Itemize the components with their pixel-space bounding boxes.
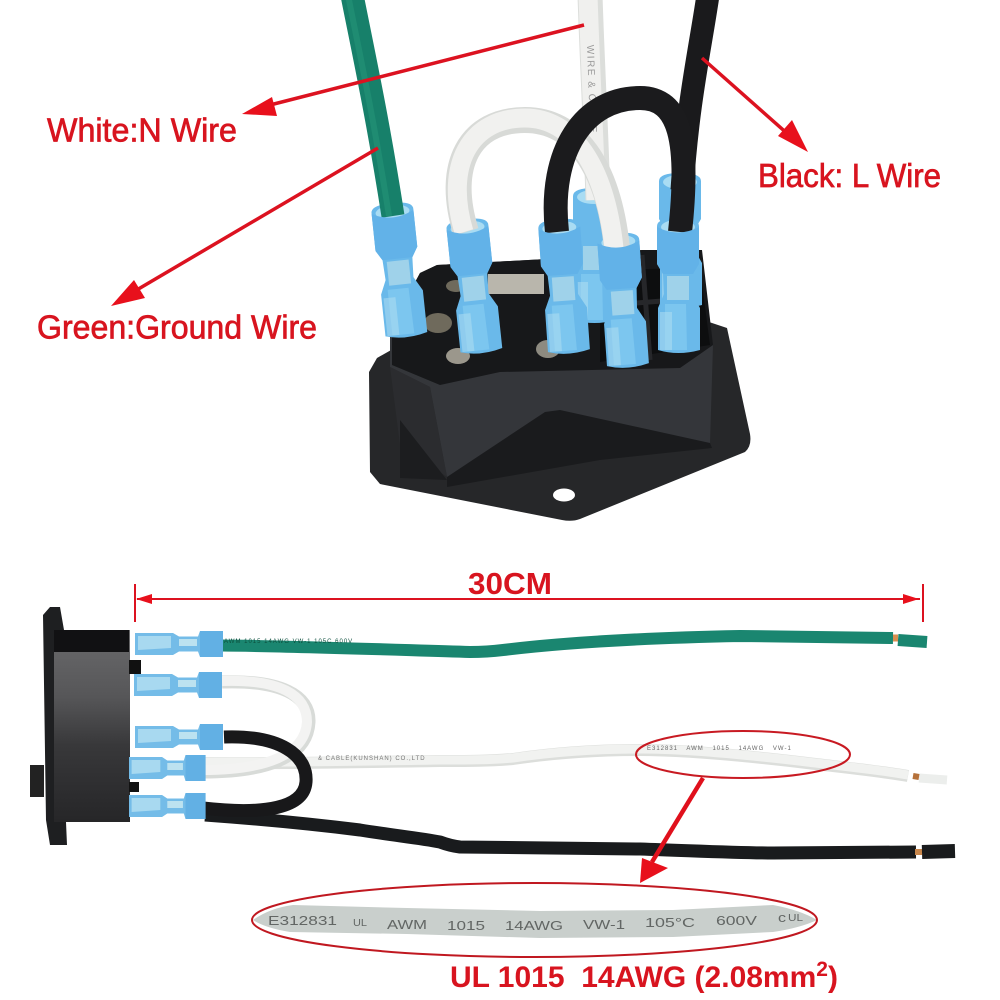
wire close-up marking: AWM	[387, 918, 427, 932]
inlet housing	[390, 250, 713, 477]
wire close-up marking	[268, 911, 803, 933]
switch tab	[30, 765, 44, 797]
white jumper wire	[203, 682, 309, 772]
arrow: black wire callout	[702, 58, 808, 152]
photo: side view of inlet with full wire length: E312831 AWM 1015 14AWG VW-1	[647, 746, 792, 752]
long black wire	[205, 815, 916, 853]
long black wire	[682, 0, 708, 190]
flange plate	[369, 300, 750, 521]
wire close-up marking: VW-1	[583, 918, 625, 932]
arrow: white wire callout	[242, 25, 584, 116]
side housing	[54, 630, 130, 822]
wire close-up marking: 14AWG	[505, 919, 563, 933]
side flange	[43, 607, 67, 845]
wire close-up marking: 105°C	[645, 916, 695, 930]
front terminals	[371, 201, 428, 339]
wire print: AWM 1015 14AWG VW-1 105C 600V	[224, 639, 353, 645]
black jumper wire	[556, 98, 684, 232]
wire close-up marking: E312831	[268, 914, 337, 928]
wire close-up marking: UL	[788, 913, 803, 924]
green wire	[352, 0, 393, 216]
photo: side view of inlet with full wire length: & CABLE(KUNSHAN) CO.,LTD	[318, 756, 426, 762]
wire close-up marking: 1015	[447, 919, 485, 933]
wire close-up marking: 600V	[716, 914, 758, 928]
wire close-up marking: UL	[353, 918, 367, 929]
wire close-up	[253, 905, 817, 938]
label: UL 1015 14AWG (2.08mm2): 2	[816, 958, 828, 981]
mounting hole	[553, 488, 575, 502]
label: UL 1015 14AWG (2.08mm2): UL 1015 14AWG (2.08mm	[450, 961, 816, 994]
long white wire	[590, 0, 598, 200]
label: Green:Ground Wire: Green:Ground Wire	[37, 308, 317, 346]
arrow: green wire callout	[111, 148, 378, 306]
arrow: zoom to wire detail	[640, 778, 703, 883]
dimension line: 30CM	[135, 567, 923, 622]
label: Black: L Wire: Black: L Wire	[758, 157, 941, 194]
long white wire	[205, 750, 908, 776]
metal plate and screws	[488, 274, 544, 294]
wire print: white wire: WIRE & CABLE	[584, 45, 598, 134]
housing top face	[392, 250, 713, 385]
large ellipse callout	[252, 883, 817, 957]
white jumper wire	[459, 120, 617, 248]
small ellipse around wire marking	[636, 731, 850, 778]
side terminals	[135, 631, 223, 657]
label: 30CM: 30CM	[468, 567, 552, 601]
wire close-up marking: c	[778, 911, 786, 925]
label: UL 1015 14AWG (2.08mm2): )	[828, 961, 838, 994]
rear terminals	[573, 188, 616, 323]
terminal collars	[372, 210, 699, 290]
green wire	[222, 636, 893, 652]
photo: top view of power inlet with wires	[348, 0, 750, 521]
photo: side view of inlet with full wire length	[30, 607, 955, 853]
label: White:N Wire: White:N Wire	[47, 112, 237, 148]
black jumper wire	[203, 737, 306, 811]
